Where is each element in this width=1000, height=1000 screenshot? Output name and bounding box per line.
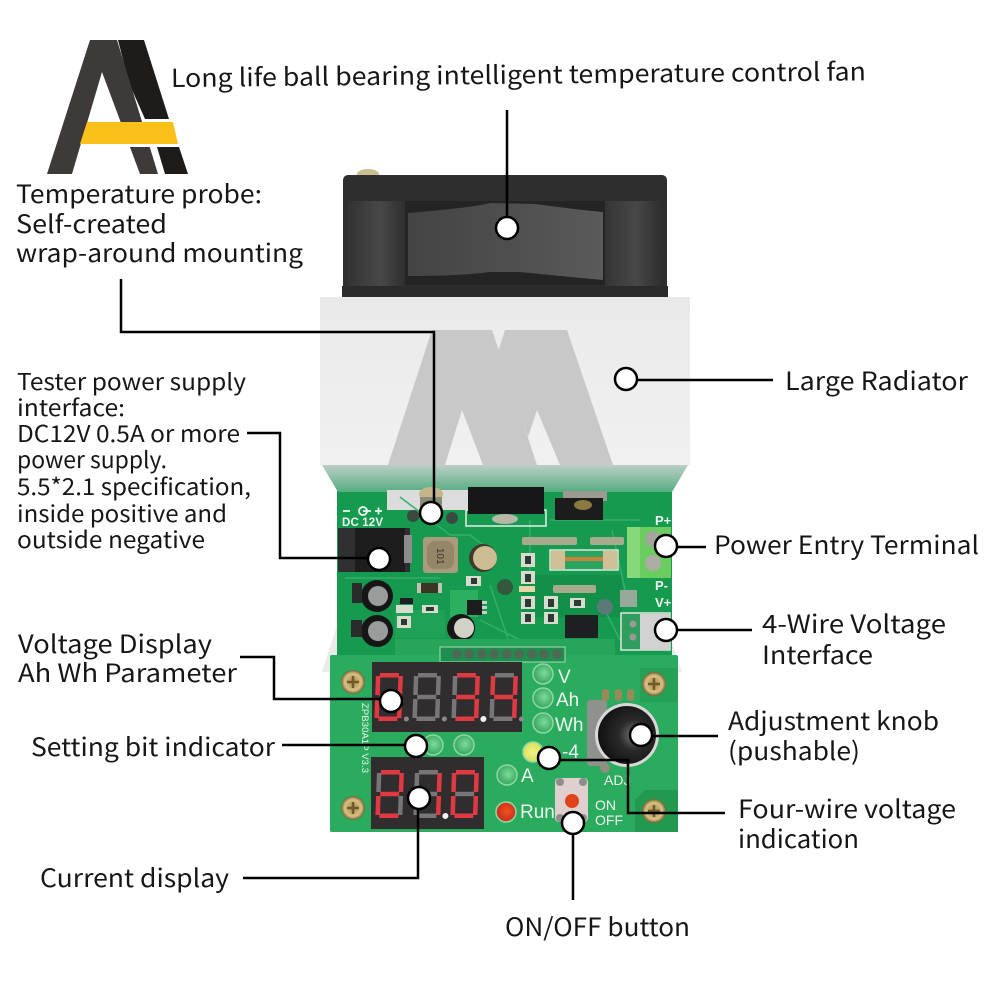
silk labels: V bbox=[558, 667, 571, 688]
text: power supply interface bbox=[17, 363, 251, 555]
inductor: 101 bbox=[434, 548, 445, 565]
text: adjustment knob: (pushable) bbox=[728, 732, 860, 768]
text: voltage display: Voltage Display bbox=[18, 625, 212, 661]
power transistors bbox=[466, 487, 607, 526]
text: ON/OFF button: ON/OFF button bbox=[505, 908, 690, 944]
text: large radiator: Large Radiator bbox=[785, 362, 968, 398]
radiator watermark bbox=[388, 330, 613, 465]
text: four-wire voltage indication bbox=[738, 790, 956, 856]
text: setting bit indicator: Setting bit indicator bbox=[31, 728, 275, 764]
text: temperature probe: Self-created bbox=[16, 205, 167, 241]
digit 4 bbox=[489, 673, 526, 722]
callout: power supply interface bbox=[247, 433, 390, 570]
digit 0 bbox=[450, 770, 479, 818]
gold capacitor bbox=[469, 544, 497, 572]
silk labels: ON bbox=[595, 797, 616, 813]
green terminal block bbox=[627, 527, 671, 578]
digit 2 bbox=[375, 770, 404, 818]
silk labels terminals: V+ bbox=[655, 595, 672, 610]
cooling fan bbox=[342, 169, 668, 297]
silk labels: -4 bbox=[562, 742, 579, 763]
callout: temperature probe bbox=[121, 279, 442, 524]
text: power supply interface: 5.5*2.1 specification, bbox=[17, 468, 251, 502]
text: temperature probe bbox=[16, 175, 303, 270]
text: power entry terminal: Power Entry Terminal bbox=[714, 526, 979, 562]
callout: radiator bbox=[615, 368, 773, 390]
callout: voltage display bbox=[240, 657, 402, 712]
silk label DC 12V: DC 12V bbox=[342, 517, 383, 529]
brand logo bbox=[47, 40, 188, 174]
digit 1 bbox=[413, 770, 450, 819]
faint watermark behind device bbox=[322, 330, 682, 672]
small SMD parts bbox=[351, 553, 637, 638]
solder strips bbox=[522, 537, 624, 593]
electrolytic capacitors bbox=[361, 580, 475, 647]
device: load tester bbox=[320, 169, 690, 832]
callout: ON/OFF button bbox=[562, 812, 584, 900]
silk labels bbox=[359, 667, 630, 828]
silk labels terminals bbox=[655, 513, 672, 610]
text: temperature probe: wrap-around mounting bbox=[16, 234, 303, 270]
text: voltage display: Ah Wh Parameter bbox=[18, 654, 237, 690]
text: adjustment knob: Adjustment knob bbox=[728, 702, 939, 738]
probe mount bbox=[407, 487, 458, 524]
digit 3 bbox=[451, 673, 488, 722]
callout: setting bit indicator bbox=[282, 735, 427, 757]
callout: 4-wire interface bbox=[655, 619, 752, 641]
sense resistor bbox=[550, 550, 618, 570]
text: power supply interface: Tester power supply bbox=[17, 363, 246, 397]
text: voltage display bbox=[18, 625, 237, 690]
inductor bbox=[423, 537, 458, 573]
mounting screws bbox=[341, 670, 666, 823]
silk labels: ADJ bbox=[604, 772, 630, 788]
callout: knob bbox=[630, 724, 718, 746]
text: power supply interface: power supply. bbox=[17, 441, 167, 475]
indicator LEDs bbox=[423, 664, 553, 822]
silk labels: A bbox=[521, 766, 534, 787]
callout: current display bbox=[243, 787, 430, 878]
callout: four-wire indication bbox=[538, 747, 725, 813]
4-wire connector bbox=[621, 613, 670, 650]
PCB lower control board bbox=[330, 639, 678, 832]
silk polarity symbol bbox=[343, 507, 382, 515]
digit 0 bbox=[374, 673, 410, 722]
tact push button bbox=[555, 778, 588, 822]
callout: power entry terminal bbox=[655, 535, 706, 557]
PCB upper section bbox=[322, 465, 688, 660]
text: temperature probe: Temperature probe: bbox=[16, 175, 262, 211]
silk labels: Wh bbox=[555, 715, 584, 736]
silk labels: OFF bbox=[595, 812, 623, 828]
header pads bbox=[452, 649, 562, 659]
text: power supply interface: inside positive and bbox=[17, 495, 227, 529]
heat sink radiator bbox=[320, 297, 690, 465]
silk labels terminals: P+ bbox=[655, 513, 672, 528]
text: power supply interface: outside negative bbox=[17, 521, 205, 555]
text: power supply interface: interface: bbox=[17, 389, 125, 423]
text: 4-wire voltage interface: 4-Wire Voltage bbox=[762, 605, 946, 641]
silk labels: Ah bbox=[556, 690, 579, 711]
current LED display bbox=[371, 757, 484, 829]
silk labels terminals: P- bbox=[655, 578, 668, 593]
text: current display: Current display bbox=[40, 859, 229, 895]
text: four-wire voltage indication: Four-wire voltage bbox=[738, 790, 956, 826]
text: 4-wire voltage interface: Interface bbox=[762, 636, 873, 672]
DC jack bbox=[338, 528, 412, 572]
adjustment knob bbox=[587, 689, 659, 773]
silk labels: Run bbox=[520, 802, 555, 823]
callout: fan bbox=[496, 110, 518, 239]
text: adjustment knob bbox=[728, 702, 939, 768]
heading: fan: Long life ball bearing intelligent temperature control fan bbox=[171, 52, 866, 95]
silk labels: ZPB30A1P V3.3 bbox=[359, 703, 370, 773]
text: 4-wire voltage interface bbox=[762, 605, 946, 672]
voltage LED display bbox=[372, 662, 526, 732]
digit 1 (off) bbox=[412, 673, 448, 722]
text: power supply interface: DC12V 0.5A or more bbox=[17, 415, 240, 449]
text: four-wire voltage indication: indication bbox=[738, 820, 859, 856]
